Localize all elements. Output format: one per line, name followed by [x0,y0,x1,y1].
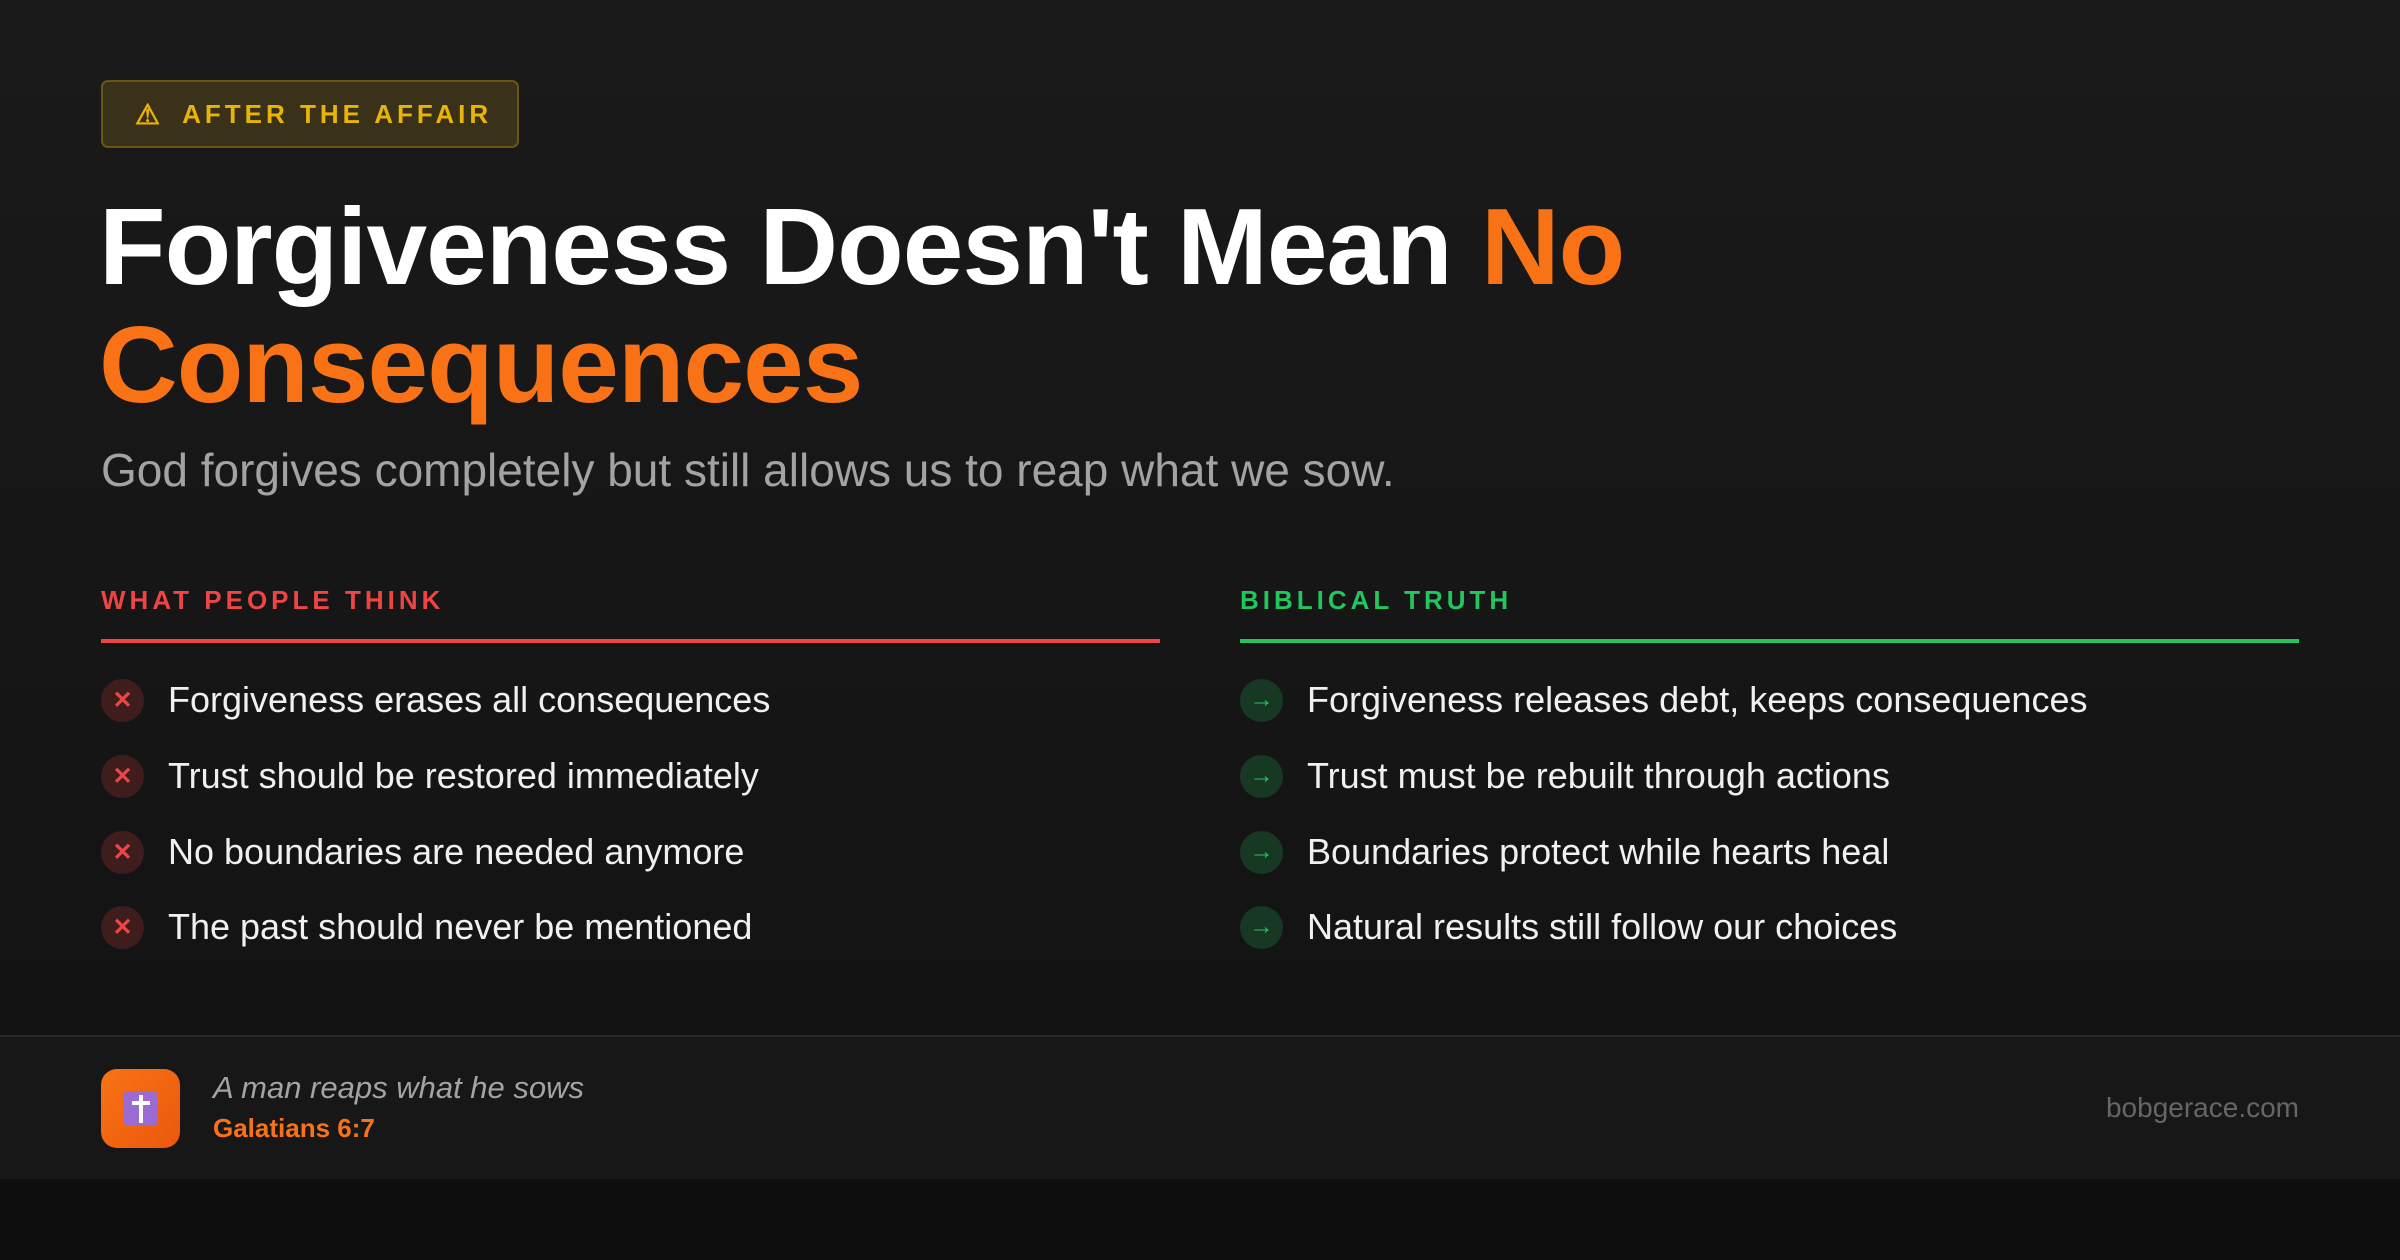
panel: biblical truth [1240,585,2299,949]
list: myths: ✕ [112,914,133,940]
title: Consequences [99,304,862,426]
list: myths: Trust should be restored immediately [168,755,759,796]
list: truths: → [1250,762,1274,789]
heading: biblical truth: BIBLICAL TRUTH [1240,585,1512,615]
list: myths: ✕ [112,686,133,714]
website: bobgerace.com [2106,1092,2299,1123]
badge: after the affair [101,80,519,148]
list: truths: → [1250,913,1274,940]
subtitle: God forgives completely but still allows us to reap what we sow. [101,444,1395,496]
heading: what people think: WHAT PEOPLE THINK [101,585,444,615]
list: myths: The past should never be mentioned [168,906,752,947]
footer [0,1035,2400,1179]
list: truths [1240,679,2087,949]
title [99,186,1624,426]
list: myths: No boundaries are needed anymore [168,831,744,872]
list: truths: Forgiveness releases debt, keeps consequences [1307,679,2087,720]
list: truths: Trust must be rebuilt through actions [1307,755,1890,796]
list: myths: Forgiveness erases all consequences [168,679,770,720]
scripture quote: Galatians 6:7 [213,1113,375,1143]
scripture quote: A man reaps what he sows [213,1070,584,1105]
badge: after the affair: ⚠ [135,98,164,130]
list: truths: → [1250,686,1274,713]
list: truths: Boundaries protect while hearts heal [1307,831,1889,872]
panel: what people think [101,585,1160,949]
list: truths: → [1250,838,1274,865]
icon: cross [101,1069,180,1148]
list: myths: ✕ [112,838,133,866]
list: truths: Natural results still follow our choices [1307,906,1897,947]
title: Forgiveness Doesn't Mean No [99,186,1624,308]
badge: after the affair: AFTER THE AFFAIR [182,98,492,128]
list: myths: ✕ [112,762,133,790]
scripture quote [212,1070,584,1143]
list: myths [101,679,770,949]
